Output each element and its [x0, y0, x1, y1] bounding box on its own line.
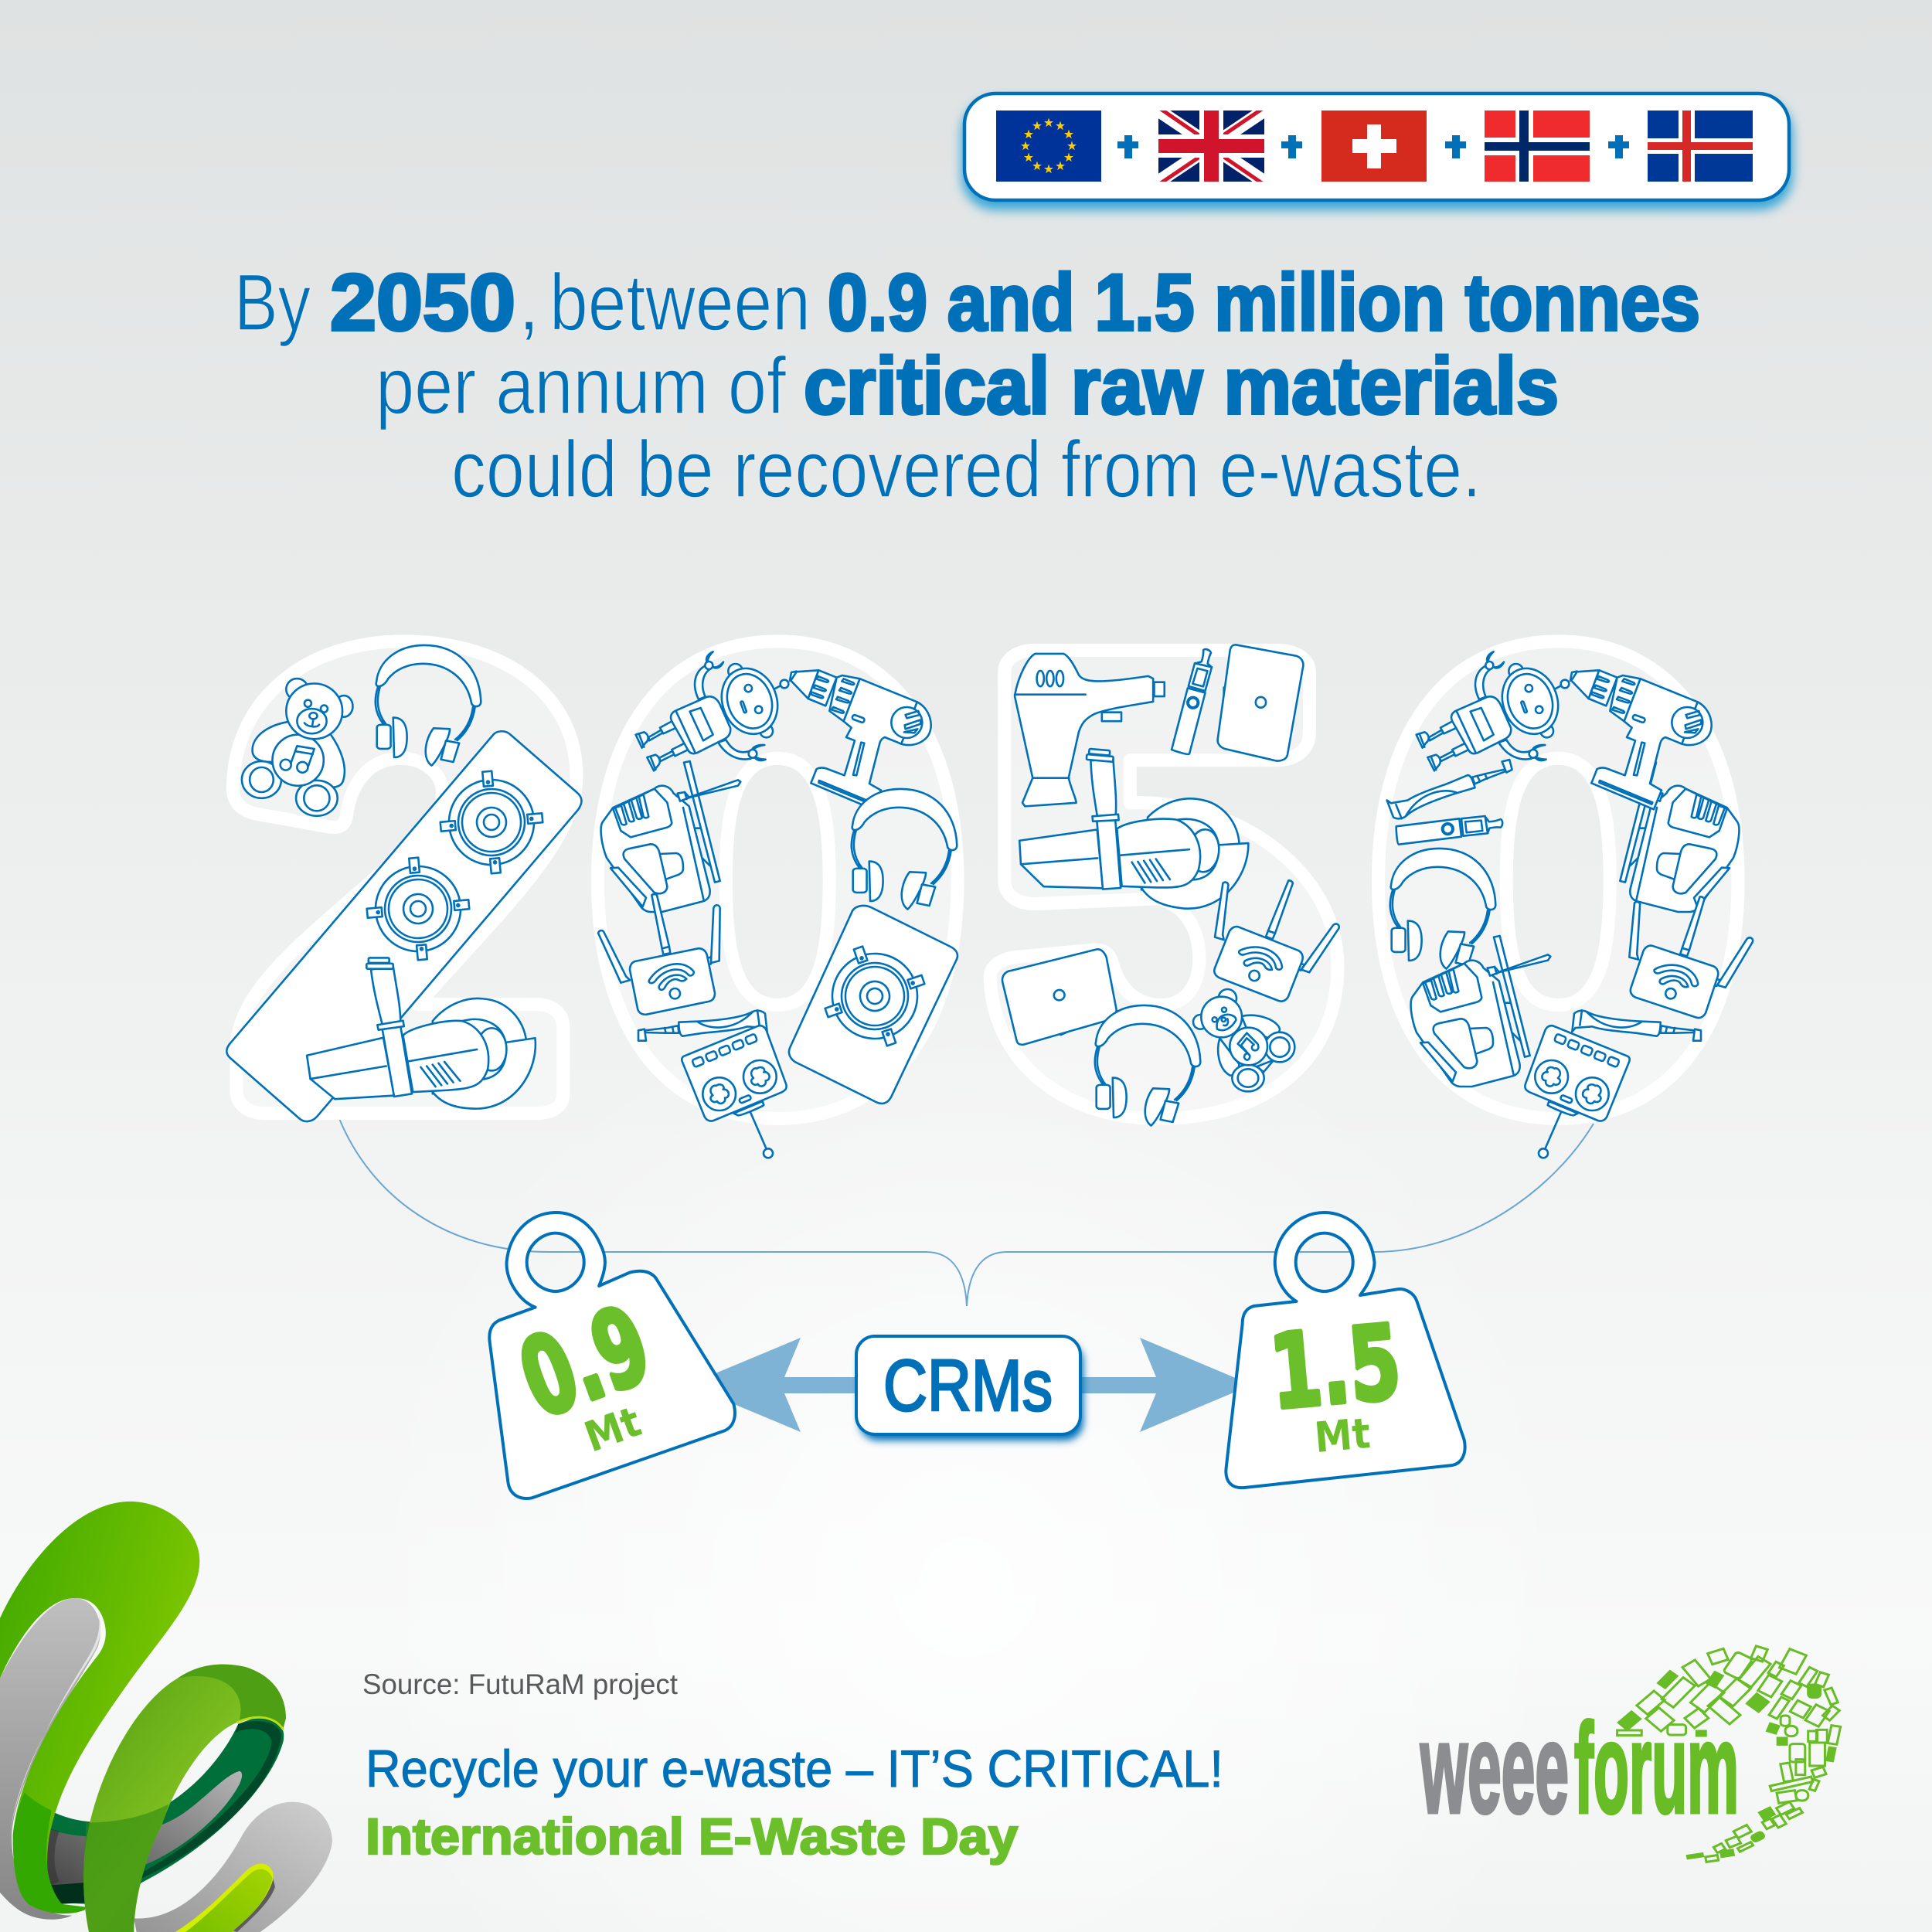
digit 5 outline [990, 650, 1338, 1118]
icon: tablet [1218, 645, 1303, 761]
icon: jigsaw mirrored [1600, 761, 1739, 912]
icon: UK flag [1158, 107, 1264, 185]
heading: 2050 [330, 258, 515, 348]
icon: wifi router [1594, 869, 1760, 1034]
icon: Swiss flag [1321, 111, 1427, 182]
value: 1.5: 1.5 [1266, 1303, 1405, 1433]
source: Source: FutuRaM project [362, 1668, 679, 1700]
icon: electric toothbrush [638, 1010, 767, 1041]
icon: plus [1608, 135, 1629, 158]
icon: tablet rotated [989, 933, 1131, 1058]
arrow: right [1074, 1338, 1252, 1432]
heading: By [234, 258, 311, 348]
heading: , [518, 258, 540, 348]
heading: could be recovered from e-waste. [451, 425, 1481, 515]
icon: teddy bear [242, 679, 352, 816]
heading: per annum of [376, 342, 787, 431]
event name: International E-Waste Day [366, 1808, 1018, 1865]
icon: game console [682, 1026, 787, 1158]
logo: WEEE Forum [1420, 1646, 1841, 1862]
heading: between [549, 258, 811, 348]
digit 2 outline [233, 641, 577, 1114]
value: 0.9: 0.9 [505, 1282, 665, 1442]
icon: Icelandic flag [1648, 111, 1753, 182]
heading: critical raw materials [804, 342, 1559, 431]
logo: WEEE Forum: forum [1574, 1697, 1739, 1839]
chart: connector lines [338, 1117, 1594, 1306]
unit: Mt: Mt [578, 1397, 647, 1461]
illustration: 2050 made of e-waste devices [226, 641, 1760, 1158]
icon: headphones [376, 645, 481, 766]
digit 0 outline second [1378, 641, 1738, 1118]
weight: 1.5 Mt [1226, 1213, 1465, 1488]
icon: electric toothbrush [1572, 1010, 1701, 1041]
weight: 0.9 Mt [489, 1213, 735, 1498]
icon: wifi router [1179, 851, 1346, 1018]
icon: plus [1445, 135, 1466, 158]
panel: flags of participating countries [961, 94, 1793, 210]
icon: projector [1015, 743, 1256, 913]
icon: Norwegian flag [1485, 111, 1590, 182]
digit 0 outline [597, 641, 957, 1118]
icon: jigsaw [601, 761, 740, 912]
icon: robot and drill [636, 651, 931, 809]
callout: CRMs [856, 1336, 1083, 1440]
tagline: Recycle your e-waste – IT’S CRITICAL! [366, 1740, 1223, 1798]
icon: vape pen [1162, 647, 1227, 757]
icon: projector [307, 957, 536, 1109]
icon: jigsaw [1411, 936, 1550, 1087]
heading [234, 258, 1700, 515]
callout: CRMs: CRMs [883, 1345, 1053, 1426]
icon: teddy bear rotated [1193, 989, 1294, 1091]
arrow: left [688, 1338, 866, 1432]
icon: plus [1117, 135, 1138, 158]
icon: vape pen [1396, 816, 1502, 845]
logo: WEEE Forum: weee [1420, 1697, 1569, 1839]
icon: single speaker panel [789, 906, 957, 1104]
icon: headphones [852, 789, 957, 910]
icon: electric toothbrush [1385, 760, 1517, 821]
heading: 0.9 and 1.5 million tonnes [828, 258, 1700, 348]
icon: headphones [1095, 1005, 1200, 1126]
logo: swirl emblem bottom left [0, 1502, 332, 1932]
icon: game console [1525, 1026, 1630, 1158]
icon: EU flag [996, 111, 1101, 182]
icon: headphones [1390, 849, 1495, 969]
icon: speaker panel with two cones [226, 731, 581, 1121]
icon: plus [1281, 135, 1302, 158]
icon: hair dryer [1015, 654, 1165, 806]
icon: robot and drill [1417, 651, 1712, 809]
icon: swirl of electronic devices [1617, 1646, 1841, 1862]
icon: wifi router [598, 894, 720, 1015]
unit: Mt: Mt [1312, 1409, 1372, 1462]
